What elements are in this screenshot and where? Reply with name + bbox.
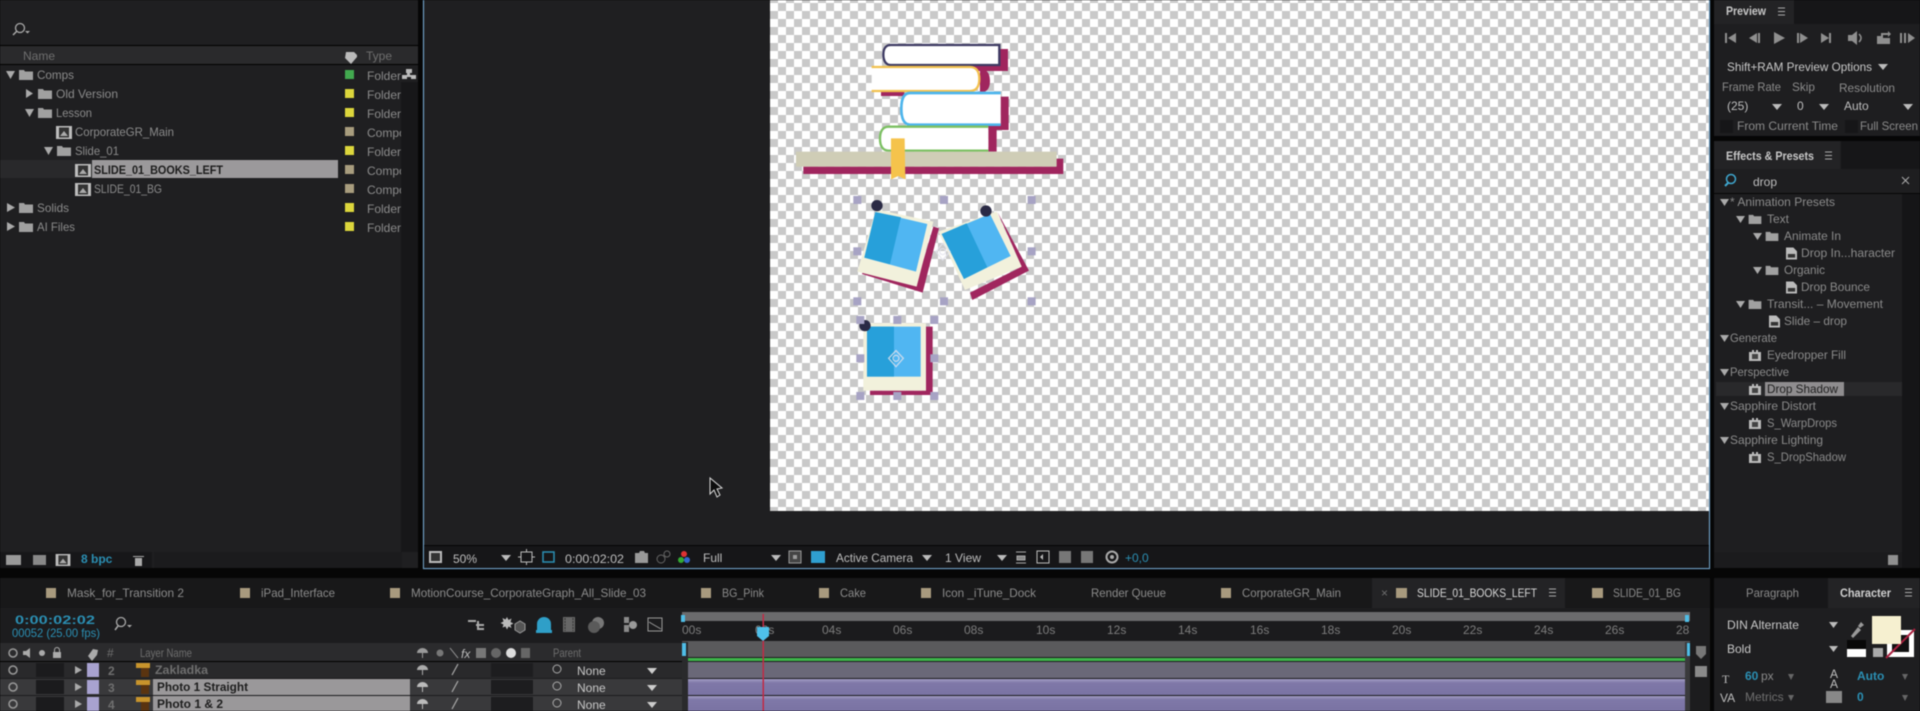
anchor points [889, 243, 950, 367]
layer 3: Photo 1 Straight: 3 [108, 681, 115, 695]
layer 2: Zakladka: Zakladka [155, 663, 208, 677]
kerning and tracking: Metrics [1745, 690, 1784, 704]
timecode: 0:00:02:02 [15, 613, 95, 627]
effects tree: sapphire lighting: Sapphire Lighting [1730, 433, 1823, 447]
effects tree: sapphire distort: Sapphire Distort [1730, 399, 1817, 413]
timeline right rail icons [1690, 608, 1710, 711]
blue book [901, 93, 1001, 125]
project row: Solids: Solids [37, 201, 69, 215]
viewer toolbar: Active Camera [836, 551, 913, 565]
selection handles [853, 196, 1036, 400]
project footer: 8 bpc [81, 552, 113, 566]
effects tree: sapphire lighting: S_DropShadow [1767, 450, 1846, 464]
viewer toolbar: +0,0 [1125, 551, 1149, 565]
ruler labels: 12s [1107, 623, 1126, 637]
timeline tabs [46, 578, 1681, 608]
layer 3: Photo 1 Straight [0, 679, 682, 695]
effects tree: generate: Eyedropper Fill [1767, 348, 1846, 362]
effects tree: animation presets: Organic [1784, 263, 1825, 277]
colour swatches [1847, 616, 1915, 658]
effects tree: sapphire distort [1720, 399, 1837, 430]
timeline tabs: × [1381, 586, 1388, 600]
timeline tabs: iPad_Interface [261, 586, 335, 600]
playhead [757, 614, 769, 711]
project column header: Type [366, 49, 392, 63]
ruler labels: 04s [822, 623, 841, 637]
photo 1 rotated [857, 200, 939, 293]
project row: Slide_01: Slide_01 [75, 144, 119, 158]
project row: AI Files: Folder [367, 221, 401, 235]
viewer toolbar: Full [703, 551, 722, 565]
project row: Comps [6, 68, 401, 83]
effects tree: sapphire lighting [1720, 433, 1846, 464]
panel: preview [1714, 0, 1920, 136]
project row: SLIDE_01_BOOKS_LEFT selected: Compo [367, 164, 406, 178]
panel: character [1714, 578, 1920, 711]
effects tree: animation presets: Drop Bounce [1801, 280, 1870, 294]
timeline tabs: Render Queue [1091, 586, 1166, 600]
project row: SLIDE_01_BOOKS_LEFT selected [75, 160, 406, 178]
layer 3: Photo 1 Straight: None [577, 681, 606, 695]
layer column header: Parent [553, 646, 582, 660]
text size and leading: A [1830, 667, 1838, 681]
project search [13, 24, 30, 35]
project row: CorporateGR_Main: Compo [367, 126, 406, 140]
book maroon shadows [881, 49, 1009, 152]
panel: composition viewer [423, 0, 1710, 569]
effects tree: generate [1720, 331, 1846, 362]
top book [883, 45, 999, 65]
project row: SLIDE_01_BG [75, 182, 406, 197]
timeline tabs: CorporateGR_Main [1242, 586, 1341, 600]
kerning and tracking: VA [1720, 691, 1735, 705]
timeline tabs: Cake [840, 586, 866, 600]
preview options [1720, 60, 1918, 133]
project row: Lesson: Folder [367, 107, 401, 121]
ruler labels: 26s [1605, 623, 1624, 637]
layer column header: # [107, 646, 114, 660]
panel: preview: Preview [1726, 4, 1767, 18]
effects tree: sapphire distort: S_WarpDrops [1767, 416, 1837, 430]
effects tree: animation presets: Slide – drop [1784, 314, 1847, 328]
timeline search [115, 618, 132, 630]
preview options: Full Screen [1860, 119, 1918, 133]
text size and leading: A [1830, 677, 1838, 691]
shelf [803, 159, 1063, 174]
yellow book [872, 67, 979, 91]
timeline tabs: MotionCourse_CorporateGraph_All_Slide_03 [411, 586, 646, 600]
ruler labels: 22s [1463, 623, 1482, 637]
panel: effects and presets: Effects & Presets [1726, 149, 1814, 163]
timeline tabs: SLIDE_01_BG [1613, 586, 1681, 600]
time ruler and tracks [681, 612, 1695, 711]
layer 4: Photo 1 & 2: Photo 1 & 2 [157, 697, 223, 711]
timeline tabs: BG_Pink [722, 586, 765, 600]
text size and leading: 60 [1745, 669, 1759, 683]
project row: AI Files: AI Files [37, 220, 75, 234]
transparency checkerboard canvas [770, 0, 1709, 511]
mouse cursor [710, 478, 722, 497]
timecode [12, 613, 100, 640]
panel: character: Paragraph [1746, 586, 1799, 600]
text size and leading [1722, 667, 1908, 691]
font family and style [1727, 618, 1864, 656]
kerning and tracking [1720, 690, 1908, 705]
project row: Lesson [25, 106, 401, 121]
layer column header: Layer Name [140, 646, 192, 660]
panel: timeline [0, 578, 1710, 711]
panel: effects and presets [1714, 141, 1920, 568]
effects search: drop [1753, 175, 1777, 189]
effects tree: animation presets: Text [1767, 212, 1790, 226]
viewer blue focus border [424, 0, 1710, 568]
ruler labels: 14s [1178, 623, 1197, 637]
text size and leading: Auto [1857, 669, 1884, 683]
layer 4: Photo 1 & 2 [0, 696, 682, 711]
project column header [23, 49, 392, 64]
timeline tabs: SLIDE_01_BOOKS_LEFT [1417, 586, 1538, 600]
timeline tabs: Icon _iTune_Dock [942, 586, 1037, 600]
viewer toolbar [424, 545, 1709, 568]
text size and leading: px [1761, 669, 1774, 683]
effects tree: generate: Generate [1730, 331, 1777, 345]
project row: SLIDE_01_BOOKS_LEFT selected: SLIDE_01_BOOKS_LEFT [94, 163, 224, 177]
ruler labels: 10s [1036, 623, 1055, 637]
ruler labels: 16s [1250, 623, 1269, 637]
preview options: From Current Time [1737, 119, 1838, 133]
project row: Solids: Folder [367, 202, 401, 216]
project scroll strip [401, 82, 418, 552]
preview transport controls [1725, 31, 1915, 45]
text size and leading: T [1722, 672, 1730, 686]
viewer toolbar: 0:00:02:02 [565, 552, 624, 566]
effects footer [1714, 552, 1902, 568]
panel: project [0, 0, 418, 568]
project row: Old Version: Old Version [56, 87, 118, 101]
work area handles [681, 615, 1691, 656]
ruler labels: 18s [1321, 623, 1340, 637]
timeline tabs: Mask_for_Transition 2 [67, 586, 184, 600]
effects tree: perspective: Perspective [1730, 365, 1789, 379]
viewer toolbar: 50% [453, 552, 477, 566]
bookmark [891, 138, 905, 179]
ruler labels: 00s [682, 623, 701, 637]
layer column header: fx [461, 647, 471, 661]
project row: SLIDE_01_BG: SLIDE_01_BG [94, 182, 162, 196]
project row: Slide_01: Folder [367, 145, 401, 159]
kerning and tracking: 0 [1857, 690, 1864, 704]
effects search [1725, 174, 1909, 189]
ruler labels: 06s [893, 623, 912, 637]
effects tree: animation presets [1720, 195, 1895, 328]
preview options: Auto [1844, 99, 1869, 113]
preview options: Frame Rate [1722, 80, 1781, 94]
layer 2: Zakladka [0, 662, 682, 678]
project row: Slide_01 [44, 144, 401, 159]
timecode: 00052 (25.00 fps) [12, 626, 100, 640]
ruler labels: 24s [1534, 623, 1553, 637]
effects tree: animation presets: Drop In...haracter [1801, 246, 1895, 260]
preview options: 0 [1797, 99, 1804, 113]
viewer toolbar: 1 View [945, 551, 981, 565]
green book [880, 127, 988, 151]
project column header: Name [23, 49, 55, 63]
effects tree: perspective: Drop Shadow [1767, 382, 1838, 396]
layer 2: Zakladka: 2 [108, 664, 115, 678]
project row: Comps: Comps [37, 68, 74, 82]
ruler labels [682, 623, 1695, 637]
preview options: (25) [1727, 99, 1748, 113]
effects tree: animation presets: Transit... – Movement [1767, 297, 1884, 311]
project row: Old Version: Folder [367, 88, 401, 102]
photo 2 rotated [938, 205, 1029, 300]
preview options: Resolution [1839, 81, 1895, 95]
photo 3 straight [859, 320, 933, 395]
panel: character: Character [1840, 586, 1891, 600]
stack of books on shelf [796, 45, 1063, 179]
timeline toolbar icons [468, 617, 662, 633]
font family and style: DIN Alternate [1727, 618, 1799, 632]
project row: AI Files [7, 220, 401, 235]
layer 3: Photo 1 Straight: Photo 1 Straight [157, 680, 248, 694]
project row: CorporateGR_Main: CorporateGR_Main [75, 125, 174, 139]
effects tree: animation presets: * Animation Presets [1730, 195, 1835, 209]
layer 2: Zakladka: None [577, 664, 606, 678]
ruler labels: 20s [1392, 623, 1411, 637]
ruler labels: 28s [1676, 623, 1695, 637]
ruler labels: 08s [964, 623, 983, 637]
layer column header [0, 643, 682, 662]
effects tree: animation presets: Animate In [1784, 229, 1841, 243]
ruler labels: 02s [755, 623, 774, 637]
photo cards with transform handles [853, 196, 1036, 400]
project row: Solids [7, 201, 401, 216]
project footer [0, 552, 402, 568]
preview options: Skip [1792, 80, 1815, 94]
project row: SLIDE_01_BG: Compo [367, 183, 406, 197]
project row: Comps: Folder [367, 69, 401, 83]
icon: project flowchart [402, 69, 416, 79]
effects tree: perspective [1716, 365, 1902, 396]
project row: Old Version [26, 87, 401, 102]
preview options: Shift+RAM Preview Options [1727, 60, 1872, 74]
font family and style: Bold [1727, 642, 1751, 656]
project row: Lesson: Lesson [56, 106, 92, 120]
project row: CorporateGR_Main [56, 125, 406, 140]
